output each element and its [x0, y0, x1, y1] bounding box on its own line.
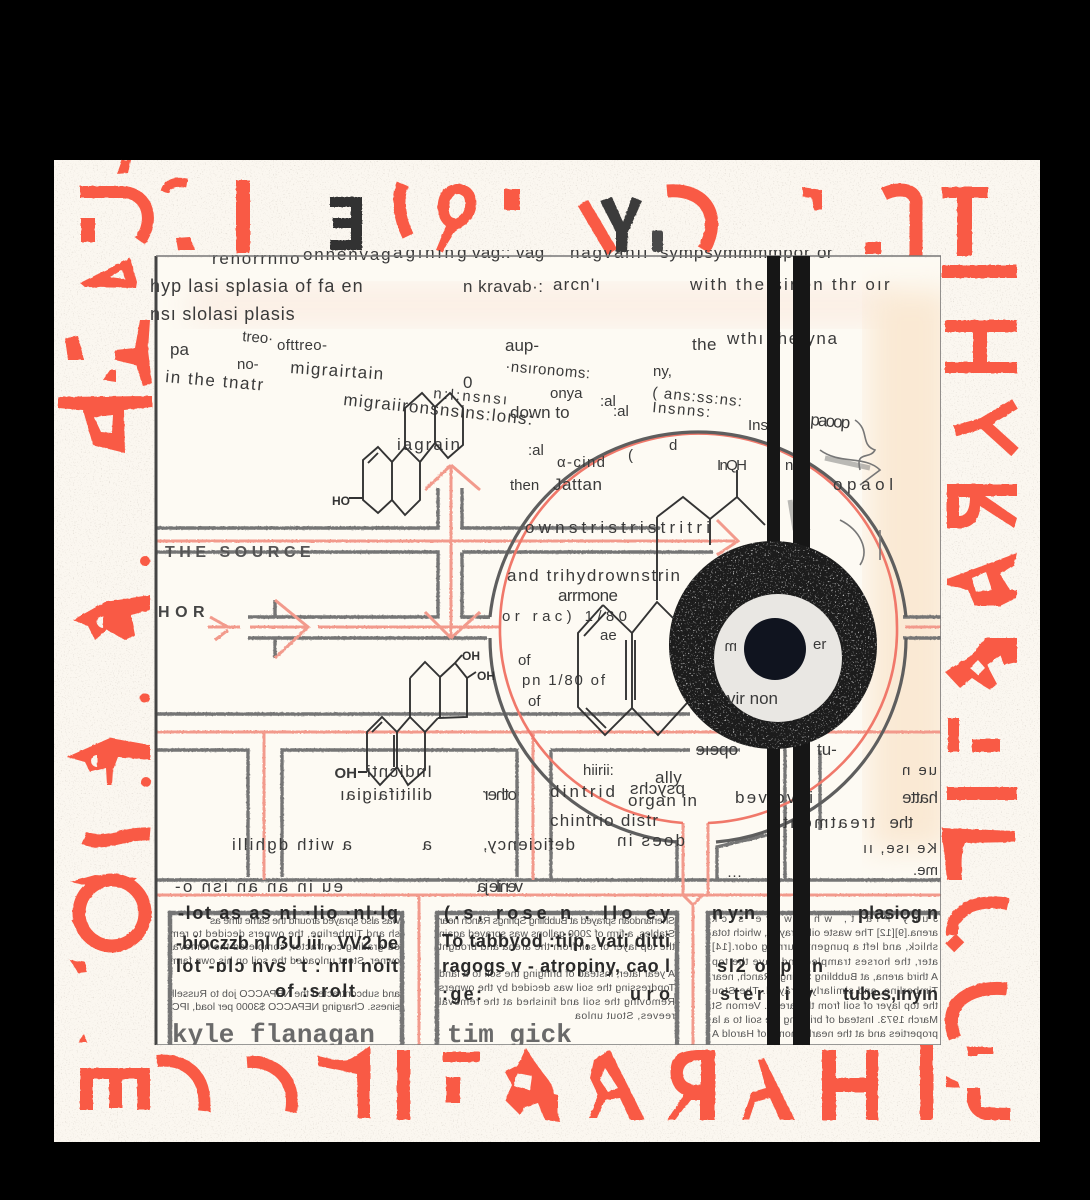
scattered typed text: ·nsıronoms: [505, 358, 591, 382]
mirrored typed text: hatte [902, 788, 938, 807]
text box 3: March 1973. Instead of bringing the soil to a la [712, 1014, 938, 1026]
upper molecule [332, 393, 463, 515]
scattered typed text: ( [628, 447, 633, 464]
text box 2: uro [630, 984, 670, 1004]
text box 1: sh and Timberline, the owners decided to rem [170, 928, 400, 940]
mirrored typed text: dilitifaigiaı [340, 785, 432, 804]
scattered typed text: iagrain [397, 435, 460, 454]
black ring target: er [813, 636, 826, 653]
black ring target: m [724, 638, 737, 655]
text box 1: -bioczzb nl ẞU ıii , VV2 be [176, 933, 398, 953]
mirrored typed text: does in [617, 831, 685, 850]
panel paper [156, 258, 950, 1045]
scattered typed text: migraiironsnsins:lons: [343, 390, 534, 429]
mirrored typed text: Indicnti [367, 762, 432, 781]
scattered typed text: ownstristristritri [525, 518, 710, 537]
scattered typed text: ofttreo- [277, 337, 327, 354]
scattered typed text: arrmone [558, 586, 618, 605]
scattered typed text: :al [613, 403, 629, 420]
text box 3: A third arena, at Bubbling Springs Ranch, near [712, 971, 938, 983]
text box 1: siness. Charging NEPACCO $3000 per load, IPC [172, 1001, 400, 1013]
scattered typed text: n:l:nsnsı [433, 385, 508, 408]
scattered typed text: THE SOURCE [165, 544, 311, 561]
scattered typed text: aup- [505, 336, 539, 355]
top row of red letters [80, 160, 988, 256]
mirrored typed text: venile ja [476, 877, 523, 896]
scattered typed text: of [518, 652, 531, 669]
black ring target: vir non [727, 689, 778, 708]
text box 3: ater, the horses trampled and gave the top [712, 956, 938, 968]
upper molecule: HO [332, 494, 350, 508]
scattered typed text: in the tnatr [165, 367, 264, 395]
text box 2: A year later, instead of bringing the soil to a land [439, 968, 675, 980]
mirrored typed text: organ in [628, 791, 697, 810]
scattered typed text: renorrnno [212, 249, 300, 268]
text box 2: :ge: [442, 984, 482, 1004]
text box 2: Removing the soil and finished at the removal [439, 996, 675, 1008]
centre molecule [578, 470, 765, 735]
scattered typed text: InQH [717, 457, 747, 474]
mirrored typed text: opeıe [695, 740, 738, 759]
text box 2: ragogs v - atropiny, cao l [442, 956, 670, 976]
scattered typed text: then [510, 477, 539, 494]
scattered typed text: agining [393, 243, 467, 262]
map scribble [790, 420, 880, 565]
panel edges [156, 256, 941, 1045]
scattered typed text: the [692, 335, 717, 354]
scattered typed text: onya [550, 385, 583, 402]
scattered typed text: treo· [242, 328, 274, 348]
lower molecule: OH [462, 649, 480, 663]
text box 1: kyle flanagan [172, 1020, 375, 1050]
text box 3: shlick, and left a pungent, burning odor.[14] [712, 941, 938, 953]
mirrored typed text: deficiency, [483, 835, 575, 854]
scattered typed text: nagvanıı [570, 243, 648, 262]
scattered typed text: down to [510, 403, 570, 422]
scattered typed text: pn 1/80 of [522, 672, 606, 689]
mirrored typed text: hiirii: [583, 762, 614, 779]
scattered typed text [150, 243, 893, 710]
mirrored typed text: a [422, 835, 432, 854]
mirrored typed text: the [889, 813, 913, 832]
inner collage panel [150, 243, 950, 1050]
scattered typed text: d [669, 437, 677, 454]
big target circle outlines [490, 432, 906, 842]
black ring target [669, 541, 877, 749]
album cover collage [54, 160, 1040, 1142]
text box 3: plasiog n [858, 903, 938, 923]
mirrored typed text: HO [334, 765, 357, 782]
text box 3: arena.[9][12] The waste oil sprayed, which tota [712, 927, 938, 939]
text box 2: reeves, Stout unloa [575, 1010, 675, 1022]
road map lines [156, 488, 941, 1045]
mirrored typed text: dintrid [550, 782, 615, 801]
scattered typed text: ( ans:ss:ns: [652, 384, 743, 410]
mirrored typed text [175, 740, 938, 896]
scattered typed text: or [817, 243, 833, 262]
text box 3: sl2 oppian [717, 956, 823, 976]
scattered typed text: n kravab·: [463, 277, 543, 296]
scattered typed text: ny, [653, 363, 672, 380]
scattered typed text: :al [528, 442, 544, 459]
right column of red letters [942, 265, 1017, 1056]
text box 2: the top layer of soil from the arena and brought [439, 941, 675, 953]
text box 3: tubes,ınyın [843, 984, 938, 1004]
double black vertical bars [767, 256, 810, 1045]
typewritten black letters on top edge [330, 197, 663, 252]
text box 1: owner, Stout unloaded the soil on his own farm [170, 955, 400, 967]
text box 1 [170, 903, 401, 1050]
text box 3 [711, 903, 938, 1040]
scattered typed text: opaol [833, 475, 893, 494]
mirrored typed text: ally [655, 768, 682, 787]
molecule diagrams [332, 393, 765, 785]
scattered typed text: HOR [158, 604, 205, 621]
scattered typed text: and trihydrownstrin [507, 566, 680, 585]
scattered typed text: pa [170, 340, 189, 359]
scattered typed text: Inss [748, 417, 776, 434]
mirrored typed text: a with dghilli [232, 835, 352, 854]
text box 3: sterility [720, 984, 813, 1004]
scattered typed text: hyp lasi splasia of fa en [150, 276, 363, 296]
scattered typed text: sympsymmmmpor [660, 243, 810, 262]
scattered typed text: nsı slolasi plasis [150, 304, 295, 324]
text box 3: n y:n [712, 903, 755, 923]
paper sheet [54, 160, 1040, 1142]
text box 1: of :srolt [275, 981, 355, 1001]
scattered typed text: of [528, 693, 541, 710]
scattered typed text: n [785, 457, 793, 474]
scattered typed text: α-cind [557, 454, 605, 471]
text box 3: properties and at the nearby home of Harold A [712, 1028, 938, 1040]
text box 2: Stables, a firm of 2000 gallons was sprayed again [439, 928, 675, 940]
scattered typed text: Insnns: [652, 399, 711, 421]
scattered typed text: 0 [463, 373, 472, 392]
text box 3: Timberline, and similarly sprayed. The Stou [712, 985, 938, 997]
scattered typed text: no- [237, 356, 259, 373]
mirrored typed text: chintrio distr [550, 811, 658, 830]
text box 2: (.s, rose n . llo ey [444, 903, 670, 923]
text box 1: ed-grading contractor, completed the removal [170, 941, 400, 953]
text box 3: Judy Piatt, who were sick [711, 913, 938, 925]
text box 2: Topdressing the soil was decided by the owners [439, 982, 675, 994]
mirrored typed text: psychs [630, 779, 685, 798]
text box 3: the top layer of soil from the arena. Vernon St [712, 1000, 938, 1012]
mirrored typed text: treatment [783, 813, 875, 832]
scattered typed text: :al [600, 393, 616, 410]
text box 1: -lot as as ni ·lio ·nl·lq [178, 903, 398, 923]
text box 2 [438, 903, 675, 1050]
lower molecule: OH [477, 669, 495, 683]
red route lines and arrows [156, 465, 941, 1045]
scattered typed text: ae [600, 627, 617, 644]
text box 1: and subcontracted the NEPACCO job to Russell [172, 988, 400, 1000]
mirrored typed text: involved [735, 788, 813, 807]
scattered typed text: or rac) 1/80 [502, 608, 627, 625]
mirrored typed text: me. [913, 862, 938, 879]
scattered typed text: arcn'ı [553, 275, 600, 294]
mirrored typed text: eu in an an isn o- [175, 877, 343, 896]
left column of red letters [58, 258, 152, 1042]
mirrored typed text: ue n [902, 762, 937, 779]
text box 2: Shenandoah sprayed at Bubbling Springs Ranch near [438, 915, 675, 927]
mirrored typed text: other [483, 785, 517, 804]
text box 2: tim gick [447, 1020, 572, 1050]
mirrored typed text: Ke ıse, ıı [863, 840, 937, 857]
scattered typed text: vag:: vag [472, 243, 545, 262]
scattered typed text: wthı the yna [726, 329, 838, 348]
text box 1: lot -ɒlɔ nvs ˈt : nfl noit [176, 956, 398, 976]
red stamped border lettering [58, 160, 1017, 1122]
scattered typed text: Jattan [553, 475, 602, 494]
bottom row of red letters [80, 1043, 1010, 1122]
scattered typed text: paoop [810, 410, 851, 432]
scattered typed text: migrairtain [290, 358, 384, 383]
mirrored typed text: ··· [727, 867, 742, 884]
text box 1: was also sprayed around the same time as [210, 915, 401, 927]
mirrored typed text: tu- [817, 740, 837, 759]
scattered typed text: with the sinen thr oır [689, 275, 890, 294]
lower molecule [358, 649, 495, 785]
text box 2: To tabbyod :tiip, vati ditti [442, 931, 670, 951]
scattered typed text: onnenvag [303, 245, 391, 264]
